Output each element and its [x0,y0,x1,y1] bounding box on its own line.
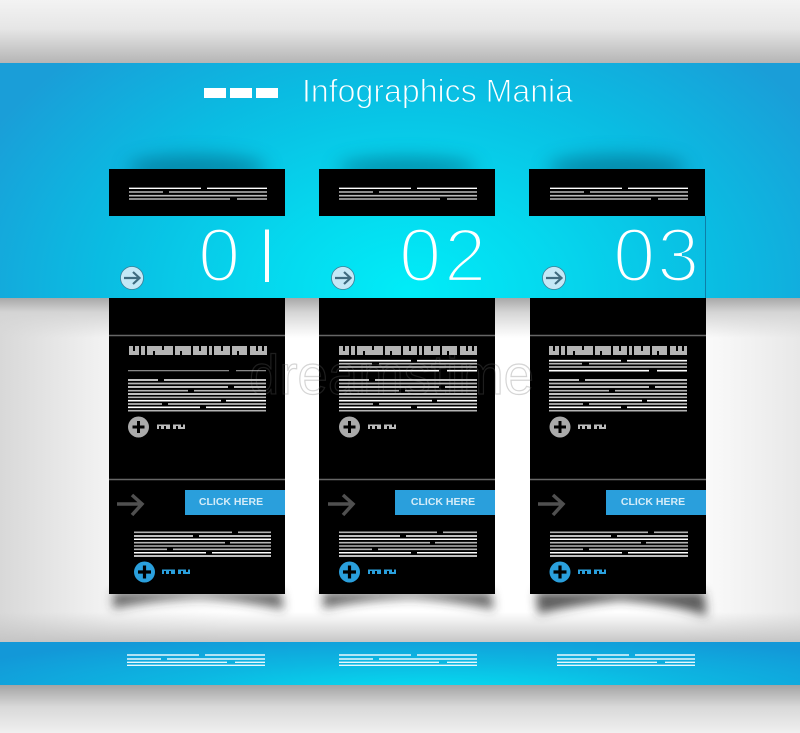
grey lines [134,532,271,549]
lower text lines [134,532,271,556]
body heading [549,346,687,355]
header text lines [550,187,688,189]
footer text lines column 2 [339,655,477,665]
small blue label [368,570,396,574]
shadows above header boxes [127,155,687,181]
icon: blue plus [134,562,155,582]
number [202,230,269,282]
small blue label [162,570,190,574]
title [204,73,573,109]
icon: arrow [538,495,563,515]
number: 2 [444,214,486,298]
header box [529,169,705,216]
button: CLICK HERE [621,496,685,508]
footer text lines column 1 [127,655,265,665]
grey lines [550,532,688,549]
number: 0 [613,214,655,298]
panel: card 3 [529,169,706,594]
small label [157,424,185,429]
right edge line [704,216,706,298]
icon: plus [339,416,360,438]
body text lines [128,370,266,372]
number: 1 [244,214,286,299]
number: 0 [399,214,441,298]
watermark: dreamstime [249,343,534,406]
card body [319,298,495,594]
icon: three dashes [204,88,278,98]
body text lines [339,361,477,407]
icon: plus [550,416,570,438]
header box [319,169,495,216]
small blue label [578,570,606,574]
body heading [129,346,267,355]
header text lines grey [550,192,688,199]
header text lines [339,187,477,189]
top blue band [0,63,800,298]
button [395,490,495,515]
small label [368,424,396,429]
white lines [339,536,477,556]
icon: arrow [328,495,353,515]
icon: arrow circle [332,266,354,290]
dividers [530,336,706,480]
button: CLICK HERE [199,496,263,508]
icon: arrow circle [542,266,566,290]
button [606,490,706,515]
icon: blue plus [339,562,360,582]
watermark over cards: dreamstime [249,343,534,406]
body text lines [549,361,687,407]
title text: Infographics Mania [302,73,573,109]
card body [530,298,706,594]
card body [109,298,285,594]
icon: arrow circle [120,266,144,290]
number: 3 [657,214,699,298]
lower text lines [550,532,688,556]
header text lines grey [339,192,477,199]
dividers [319,336,495,480]
white lines [134,536,271,556]
footer text lines column 3 [557,655,695,665]
shadows below cards [113,592,707,616]
button [185,490,285,515]
button: CLICK HERE [411,496,475,508]
bottom blue band [0,642,800,685]
body heading [339,346,477,355]
header box [109,169,285,216]
white lines [550,536,688,556]
panel: card 1 [109,169,286,594]
icon: arrow [117,495,142,515]
small label [578,424,606,429]
number: 0 [198,214,240,298]
panel: card 2 [319,169,495,594]
icon: blue plus [550,562,570,582]
header text lines [129,187,267,189]
lower text lines [339,532,477,556]
grey lines [339,532,477,549]
dividers [109,336,285,480]
icon: plus [128,416,149,438]
header text lines grey [129,192,267,199]
